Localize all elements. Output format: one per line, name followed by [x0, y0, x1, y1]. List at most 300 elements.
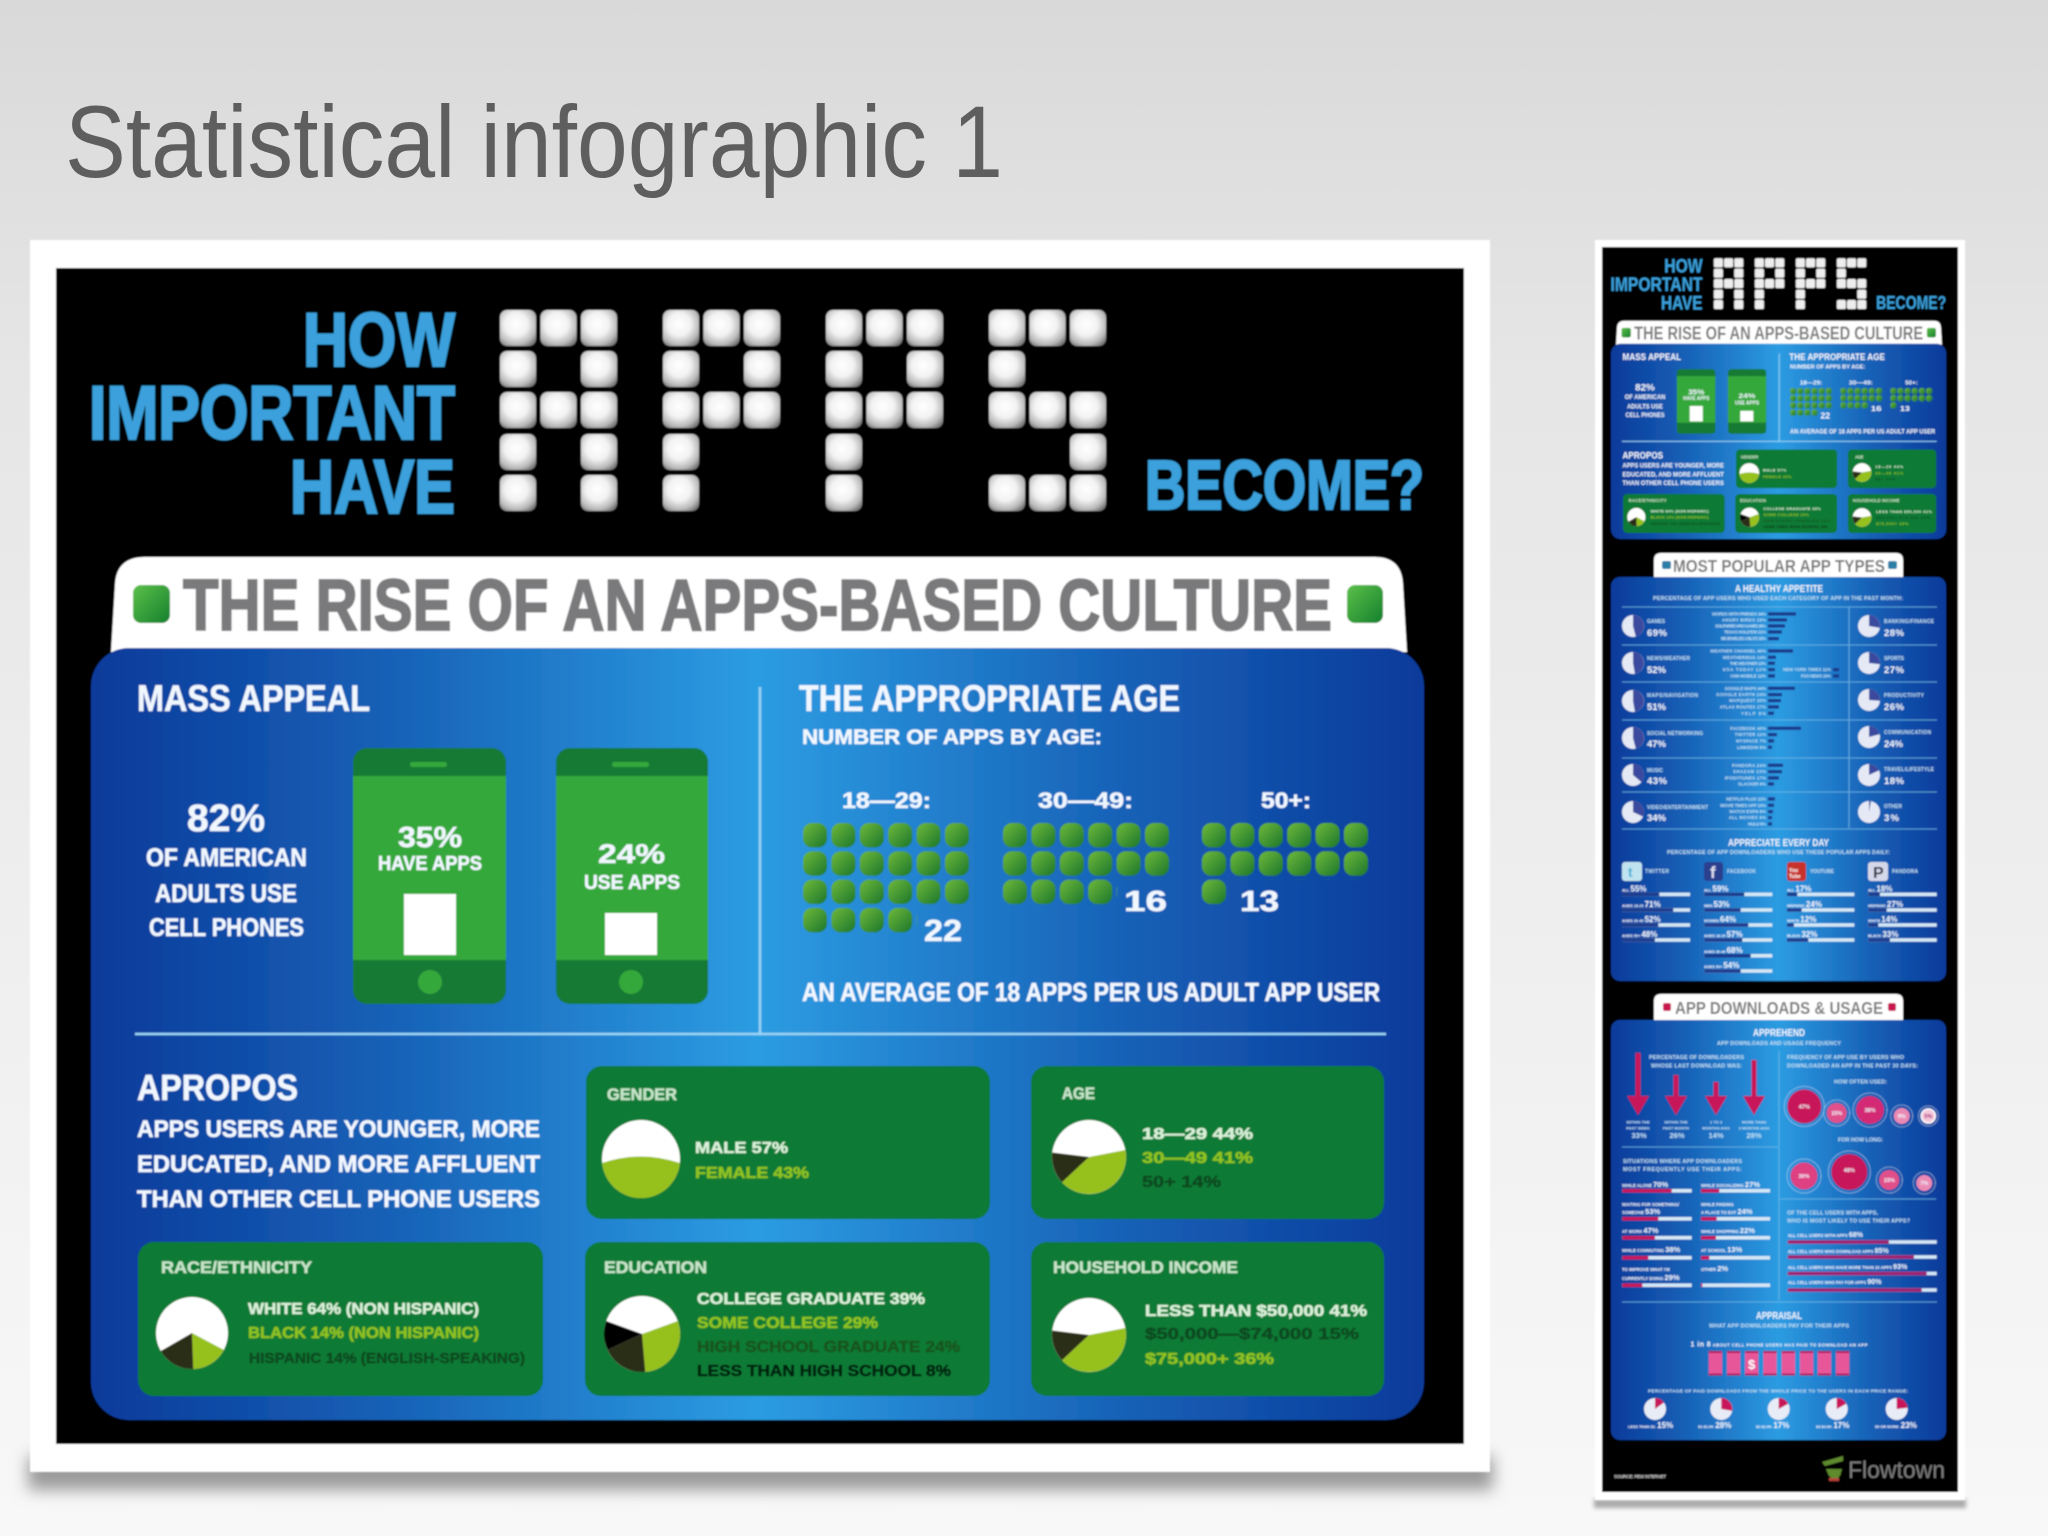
situations labels: AT SCHOOL 13%: [1701, 1245, 1742, 1254]
popular apps labels: TEXAS HOLD'EM 21%: [1724, 630, 1766, 634]
likely users labels: ALL CELL USERS WHO HAVE MORE THAN 10 APPS 93%: [1788, 1264, 1908, 1271]
ribbon: most popular app types: MOST POPULAR APP TYPES: [1673, 556, 1885, 576]
card: household income: [1031, 1242, 1384, 1396]
icon: phone 35% have apps: HAVE APPS: [378, 853, 482, 875]
heading: a healthy appetite: PERCENTAGE OF APP USERS WHO USED EACH CATEGORY OF APP IN THE PAST MONTH:: [1653, 596, 1903, 602]
popular apps labels: YELP 8%: [1741, 711, 1766, 716]
chart: how often used bubbles: 15%: [1831, 1111, 1842, 1117]
popular apps labels: ANGRY BIRDS 29%: [1722, 618, 1766, 622]
thumbnail panel 1 content: MASS APPEAL: [1623, 352, 1681, 362]
daily use value labels: ALL 55%: [1622, 884, 1646, 894]
thumbnail panel 1 content: RACE/ETHNICITY: [1629, 498, 1667, 503]
social app names: YOUTUBE: [1810, 869, 1835, 875]
left category labels: SOCIAL NETWORKING: [1647, 731, 1703, 737]
headline: become: BECOME?: [1145, 446, 1424, 524]
arrow labels: 33%: [1631, 1131, 1647, 1140]
thumbnail panel 1 content: BLACK 14% (NON HISPANIC): [1650, 515, 1709, 520]
thumbnail panel 1 content: LESS THAN $50,000 41%: [1876, 509, 1932, 514]
daily use value labels: AGES 30-49 52%: [1622, 915, 1661, 924]
left category labels: 47%: [1647, 739, 1667, 750]
card: education: COLLEGE GRADUATE 39%: [697, 1291, 925, 1308]
left category labels: VIDEO/ENTERTAINMENT: [1647, 805, 1708, 811]
popular apps labels: ATLAS ROUTES 17%: [1720, 704, 1766, 710]
popular apps labels: ALL MOVIES 6%: [1729, 815, 1766, 820]
price range labels: LESS THAN $1: 15%: [1628, 1421, 1673, 1430]
block: mass appeal: MASS APPEAL: [137, 678, 370, 719]
heading: apprehend: [1649, 1028, 1841, 1070]
chart: daily use bar tracks: [1622, 893, 1937, 973]
price range labels: $1-$1.99: 28%: [1698, 1421, 1731, 1430]
icons: social apps: [1622, 862, 1888, 882]
daily use value labels: AGES 50+ 54%: [1704, 961, 1739, 970]
thumbnail panel 1 content: ADULTS USE: [1627, 403, 1663, 410]
card: race/ethnicity: BLACK 14% (NON HISPANIC): [248, 1325, 479, 1342]
chart: popular apps bars: [1768, 612, 1839, 826]
thumbnail panel 1 content: $75,000+ 36%: [1876, 521, 1909, 526]
icon: phone 24% use apps: [556, 748, 708, 1004]
right category labels: 26%: [1884, 702, 1905, 713]
icons: 1 in 8 phones: $: [1748, 1357, 1756, 1372]
left category labels: 34%: [1647, 813, 1667, 824]
card: age: 30—49 41%: [1142, 1150, 1253, 1167]
thumbnail panel 1 content: 18—29:: [1800, 380, 1822, 387]
arrow labels: PAST WEEK: [1626, 1126, 1650, 1130]
right category labels: BANKING/FINANCE: [1884, 619, 1935, 625]
likely users labels: ALL CELL USERS WITH APPS 68%: [1788, 1232, 1864, 1239]
heading: apprehend: PERCENTAGE OF DOWNLOADERS: [1649, 1055, 1744, 1061]
thumbnail headline: BECOME?: [1876, 293, 1946, 313]
right category labels: OTHER: [1884, 804, 1902, 810]
chart: how often used bubbles: 47%: [1799, 1104, 1810, 1110]
slide title: Statistical infographic 1: [65, 85, 1003, 199]
daily use value labels: WHITE 12%: [1787, 915, 1816, 924]
popular apps labels: SHAZAM 23%: [1733, 769, 1766, 774]
headline: how important have: HAVE: [290, 445, 455, 530]
chart: right category pies: [1858, 615, 1880, 823]
block: mass appeal: CELL PHONES: [149, 914, 304, 942]
thumbnail panel 1 content: HAVE APPS: [1683, 396, 1710, 402]
thumbnail frame shadow: [1594, 1499, 1966, 1508]
daily use value labels: WOMEN 64%: [1704, 915, 1736, 924]
thumbnail white frame: [1595, 240, 1965, 1500]
price range labels: [1628, 1421, 1917, 1430]
popular apps labels: WEATHERBUG 14%: [1723, 655, 1766, 660]
caption: paid downloads: PERCENTAGE OF PAID DOWNLOADS FROM THE WHOLE PRICE TO THE USERS IN EACH PRICE RANGE:: [1648, 1388, 1908, 1394]
icons: social apps: You: [1789, 868, 1798, 874]
logo: Flowtown: Flowtown: [1848, 1457, 1945, 1484]
social app names: TWITTER: [1645, 869, 1669, 875]
card: gender: MALE 57%: [695, 1140, 788, 1157]
card: age: 18—29 44%: [1142, 1126, 1253, 1143]
popular apps labels: THE WEATHER 13%: [1730, 661, 1766, 666]
heading: appraisal: [1690, 1311, 1868, 1348]
block: the appropriate age: [799, 678, 1380, 1007]
chart: for how long bubbles: 15%: [1884, 1178, 1895, 1184]
daily use value labels: HISPANIC 24%: [1787, 900, 1822, 909]
left category labels: 52%: [1647, 665, 1667, 676]
arrow labels: MORE THAN: [1742, 1120, 1766, 1124]
card: education: LESS THAN HIGH SCHOOL 8%: [697, 1363, 951, 1380]
block: apropos text: THAN OTHER CELL PHONE USERS: [137, 1186, 540, 1213]
main frame shadow: [28, 1456, 1493, 1490]
block: the appropriate age: 18—29:: [842, 788, 931, 813]
right category labels: 28%: [1884, 628, 1905, 639]
situations labels: WHILE FINDING: [1701, 1202, 1734, 1207]
thumbnail panel 1 content: SOME COLLEGE 29%: [1763, 512, 1809, 517]
blue panel 2: [1611, 577, 1946, 981]
card: household income: LESS THAN $50,000 41%: [1145, 1303, 1367, 1320]
thumbnail panel 1 content: GENDER: [1741, 454, 1758, 459]
heading: frequency of app use: [1787, 1055, 1918, 1144]
card: age: AGE: [1062, 1084, 1095, 1103]
situations labels: OTHER 2%: [1701, 1264, 1728, 1273]
chart: how often used bubbles: 5%: [1924, 1114, 1932, 1120]
popular apps labels: LINKEDIN 5%: [1737, 745, 1766, 750]
chart: daily use bar fills: [1622, 893, 1890, 973]
popular apps labels: NETFLIX PLUS 12%: [1726, 796, 1766, 802]
headline: how important have: [89, 298, 455, 530]
situations labels: [1622, 1180, 1760, 1282]
social app names: PANDORA: [1892, 869, 1918, 875]
thumbnail panel 1 content: AN AVERAGE OF 18 APPS PER US ADULT APP USER: [1790, 428, 1935, 435]
thumbnail section 2: most popular app types: [1611, 553, 1946, 981]
thumbnail panel 1 content: 50+ 14%: [1875, 476, 1896, 481]
daily use value labels: ALL 17%: [1787, 884, 1811, 894]
chart: for how long bubbles: 48%: [1844, 1168, 1855, 1174]
card: age: 50+ 14%: [1142, 1174, 1221, 1191]
daily use value labels: HISPANIC 27%: [1868, 900, 1903, 909]
situations labels: WHILE COMMUTING 38%: [1622, 1245, 1681, 1254]
icons: social apps: Tube: [1789, 874, 1801, 880]
situations labels: A PLACE TO EAT 24%: [1701, 1207, 1753, 1216]
block: the appropriate age: AN AVERAGE OF 18 APPS PER US ADULT APP USER: [802, 977, 1380, 1007]
heading: frequency of app use: HOW OFTEN USED:: [1834, 1080, 1887, 1086]
heading: a healthy appetite: [1653, 584, 1903, 602]
thumbnail headline: IMPORTANT: [1610, 275, 1703, 296]
thumbnail panel 1 content: EDUCATED, AND MORE AFFLUENT: [1623, 472, 1724, 478]
thumbnail panel 1 content: 50+:: [1905, 380, 1918, 387]
likely users labels: ALL CELL USERS WHO DOWNLOAD APPS 85%: [1788, 1248, 1889, 1255]
chart: apps by age pictograms: [803, 823, 1372, 935]
block: the appropriate age: 30—49:: [1038, 788, 1133, 813]
heading: situations: MOST FREQUENTLY USE THEIR APPS:: [1623, 1167, 1742, 1173]
thumbnail panel 1 content: 13: [1900, 404, 1910, 413]
thumbnail panel 1 content: WHITE 64% (NON HISPANIC): [1650, 509, 1709, 514]
block: the appropriate age: THE APPROPRIATE AGE: [799, 678, 1180, 719]
left category labels: GAMES: [1647, 619, 1666, 625]
block: the appropriate age: 13: [1240, 886, 1279, 918]
panel: enlarged infographic excerpt: [30, 240, 1490, 1472]
daily use value labels: [1622, 884, 1903, 970]
social app names: FACEBOOK: [1727, 869, 1756, 875]
thumbnail section 1: rise of apps culture: [1610, 256, 1946, 539]
headline: how important have: HOW: [303, 298, 455, 383]
left category labels: 51%: [1647, 702, 1667, 713]
block: mass appeal: ADULTS USE: [155, 880, 297, 908]
popular apps labels: USA TODAY 12%: [1723, 667, 1766, 672]
thumbnail panel 1 content: USE APPS: [1735, 401, 1760, 407]
thumbnail panel 1 content: COLLEGE GRADUATE 39%: [1763, 506, 1821, 511]
situations labels: WAITING FOR SOMETHING/: [1622, 1202, 1680, 1207]
likely users labels: ALL CELL USERS WHO PAY FOR APPS 90%: [1788, 1279, 1882, 1286]
heading: apprehend: WHOSE LAST DOWNLOAD WAS:: [1651, 1064, 1742, 1070]
thumbnail blue panel 1: [1611, 344, 1946, 539]
thumbnail headline: [1610, 256, 1946, 315]
headline: APPS pixel letters: [500, 310, 1106, 511]
blue panel 3: [1611, 1020, 1946, 1440]
chart: for how long bubbles: 30%: [1798, 1174, 1810, 1180]
popular apps labels: SOLITAIRE/CARD GAMES 26%: [1715, 624, 1766, 628]
popular apps labels: HULU 6%: [1748, 822, 1766, 826]
card: education: EDUCATION: [604, 1258, 707, 1277]
chart: situations bar fills: [1622, 1189, 1719, 1287]
thumbnail panel 1 content: 18—29 44%: [1875, 464, 1904, 469]
heading: situations: SITUATIONS WHERE APP DOWNLOADERS: [1623, 1159, 1742, 1165]
panel: blue content area: [91, 648, 1424, 1420]
thumbnail panel 1 content: 30—49:: [1849, 380, 1873, 387]
daily use value labels: MEN 53%: [1704, 900, 1730, 909]
card: education: HIGH SCHOOL GRADUATE 24%: [697, 1339, 960, 1356]
heading: appraisal: APPRAISAL: [1756, 1311, 1802, 1322]
icons: 1 in 8 phones: [1709, 1351, 1849, 1376]
popular apps labels: GOOGLE EARTH 24%: [1716, 692, 1766, 697]
source note: SOURCE: PEW INTERNET: [1614, 1474, 1666, 1479]
popular apps labels: PANDORA 24%: [1732, 763, 1766, 768]
thumbnail panel 1 content: THE APPROPRIATE AGE: [1789, 352, 1885, 362]
arrow labels: [1626, 1120, 1769, 1140]
panel: full infographic thumbnail: [1595, 240, 1965, 1500]
situations labels: TO IMPROVE WHAT I'M: [1622, 1267, 1670, 1272]
arrow labels: 26%: [1669, 1131, 1685, 1140]
heading: appreciate every day: PERCENTAGE OF APP DOWNLOADERS WHO USE THESE POPULAR APPS DAILY:: [1667, 850, 1890, 856]
heading: appraisal: 1 in 8 ABOUT CELL PHONE USERS HAS PAID TO DOWNLOAD AN APP: [1690, 1342, 1868, 1348]
headline: how important have: IMPORTANT: [89, 371, 455, 456]
popular apps labels: MAPQUEST 20%: [1729, 698, 1766, 703]
icon: phone 24% use apps: 24%: [598, 839, 665, 869]
block: mass appeal: 82%: [187, 798, 265, 840]
arrow labels: WITHIN THE: [1664, 1120, 1688, 1124]
thumbnail panel 1 content: 35%: [1688, 387, 1705, 396]
heading: appraisal: WHAT APP DOWNLOADERS PAY FOR THEIR APPS: [1709, 1324, 1849, 1330]
thumbnail panel 1 content: AGE: [1855, 454, 1864, 459]
thumbnail panel 1 content: CELL PHONES: [1626, 412, 1665, 419]
heading: frequency of app use: DOWNLOADED AN APP IN THE PAST 30 DAYS:: [1787, 1064, 1918, 1070]
card: age: [1031, 1066, 1384, 1219]
thumbnail panel 1 content: $50,000—$74,000 15%: [1876, 515, 1930, 520]
popular apps labels: FOX NEWS 10%: [1801, 674, 1831, 678]
thumbnail panel 1 content: [1622, 352, 1937, 533]
situations labels: WHILE SOCIALIZING 27%: [1701, 1180, 1760, 1189]
black background: [56, 268, 1464, 1444]
card: gender: FEMALE 43%: [695, 1165, 809, 1182]
heading: appreciate every day: [1667, 838, 1890, 856]
icon: phone 24% use apps: USE APPS: [584, 872, 680, 894]
card: gender: GENDER: [607, 1085, 677, 1104]
card: race/ethnicity: WHITE 64% (NON HISPANIC): [248, 1301, 479, 1318]
daily use value labels: AGES 18-29 57%: [1704, 930, 1743, 939]
popular apps labels: NEW YORK TIMES 11%: [1783, 667, 1831, 672]
ribbon: app downloads and usage: APP DOWNLOADS & USAGE: [1675, 998, 1883, 1018]
thumbnail APPS pixel letters: [1714, 258, 1866, 309]
popular apps labels: SLACKER 9%: [1738, 782, 1766, 786]
thumbnail panel 1 content: 30—49 41%: [1875, 470, 1904, 475]
thumbnail panel 1 content: APPS USERS ARE YOUNGER, MORE: [1623, 463, 1724, 469]
heading: appreciate every day: APPRECIATE EVERY DAY: [1728, 838, 1829, 849]
right category labels: TRAVEL/LIFESTYLE: [1884, 767, 1935, 773]
card: household income: $50,000—$74,000 15%: [1145, 1326, 1359, 1343]
price range labels: $2-$2.99: 17%: [1756, 1421, 1789, 1430]
thumbnail panel 1 content: THAN OTHER CELL PHONE USERS: [1623, 481, 1724, 487]
daily use value labels: ALL 18%: [1868, 884, 1892, 894]
social app names: [1645, 869, 1918, 875]
chart: for how long bubbles: [1787, 1151, 1935, 1194]
icons: social apps: t: [1628, 864, 1633, 880]
icons: social apps: P: [1873, 865, 1884, 882]
situations labels: AT WORK 47%: [1622, 1226, 1659, 1235]
left category labels: NEWS/WEATHER: [1647, 656, 1690, 662]
popular apps labels: WEATHER CHANNEL 46%: [1710, 648, 1766, 654]
thumbnail panel 1 content: HISPANIC 14% (ENGLISH-SPEAKING): [1651, 522, 1721, 526]
right category labels: 18%: [1884, 776, 1905, 787]
block: the appropriate age: 22: [924, 913, 962, 948]
left category labels: [1647, 619, 1708, 824]
chart: for how long bubbles: 7%: [1920, 1181, 1928, 1187]
thumbnail panel 1 content: APROPOS: [1623, 450, 1663, 460]
heading: a healthy appetite: A HEALTHY APPETITE: [1735, 584, 1823, 595]
section ribbon: the rise of an apps-based culture: THE RISE OF AN APPS-BASED CULTURE: [183, 566, 1332, 646]
right category labels: 3%: [1884, 813, 1900, 824]
daily use value labels: AGES 30-49 68%: [1704, 946, 1743, 955]
thumbnail ribbon: THE RISE OF AN APPS-BASED CULTURE: [1634, 323, 1923, 344]
card: race/ethnicity: RACE/ETHNICITY: [161, 1258, 313, 1277]
situations labels: SOMEONE 53%: [1622, 1207, 1661, 1216]
daily use value labels: ALL 59%: [1704, 884, 1728, 894]
popular apps labels: WORDS WITH FRIENDS 34%: [1712, 612, 1766, 616]
thumbnail panel 1 content: 22: [1820, 411, 1831, 420]
thumbnail headline: HAVE: [1661, 294, 1703, 315]
heading: of the cell users: OF THE CELL USERS WITH APPS,: [1787, 1210, 1878, 1216]
left category labels: MAPS/NAVIGATION: [1647, 693, 1698, 699]
daily use value labels: AGES 18-29 71%: [1622, 900, 1661, 909]
price range labels: $3-$4.99: 17%: [1816, 1421, 1849, 1430]
heading: situations: [1623, 1159, 1742, 1173]
chart grid lines: [1622, 607, 1937, 829]
right category labels: 24%: [1884, 739, 1904, 750]
popular apps labels: [1710, 612, 1831, 826]
thumbnail black background: [1602, 247, 1958, 1492]
card: household income: $75,000+ 36%: [1145, 1351, 1274, 1368]
arrow labels: 3 MONTHS AGO: [1739, 1126, 1769, 1130]
thumbnail panel 1 content: HIGH SCHOOL GRADUATE 24%: [1763, 518, 1830, 523]
price range labels: $5 OR MORE: 23%: [1875, 1421, 1917, 1430]
left category labels: 69%: [1647, 628, 1668, 639]
card: gender: [586, 1066, 990, 1219]
card: race/ethnicity: [138, 1242, 543, 1396]
chart: how often used bubbles: 38%: [1864, 1108, 1876, 1114]
arrow labels: MONTHS AGO: [1702, 1126, 1730, 1130]
arrow labels: PAST MONTH: [1663, 1126, 1689, 1130]
daily use value labels: WHITE 14%: [1868, 915, 1897, 924]
thumbnail panel 1 content: OF AMERICAN: [1625, 394, 1666, 401]
card: education: [585, 1242, 990, 1396]
popular apps labels: TWITTER 11%: [1735, 732, 1766, 737]
left category labels: MUSIC: [1647, 768, 1663, 774]
block: apropos text: APROPOS: [137, 1067, 298, 1108]
icon: phone 35% have apps: 35%: [398, 822, 462, 854]
popular apps labels: MOVIE TIMES APP 10%: [1720, 803, 1766, 808]
heading: frequency of app use: FREQUENCY OF APP USE BY USERS WHO: [1787, 1055, 1905, 1061]
thumbnail panel 1 content: MALE 57%: [1763, 468, 1787, 473]
thumbnail panel 1 content: 16: [1871, 404, 1882, 413]
thumbnail headline: HOW: [1664, 256, 1703, 277]
card: household income: HOUSEHOLD INCOME: [1053, 1258, 1238, 1277]
block: the appropriate age: 50+:: [1261, 788, 1311, 813]
heading: of the cell users: WHO IS MOST LIKELY TO USE THEIR APPS?: [1787, 1218, 1911, 1224]
block: mass appeal: [137, 678, 370, 942]
thumbnail section 3: app downloads and usage: [1611, 994, 1946, 1484]
heading: of the cell users: [1787, 1210, 1911, 1224]
left category labels: 43%: [1647, 776, 1668, 787]
icons: social apps: f: [1710, 863, 1716, 882]
arrow labels: 28%: [1746, 1131, 1762, 1140]
popular apps labels: BEJEWELED 2 BLITZ 15%: [1721, 636, 1766, 641]
right category labels: SPORTS: [1884, 656, 1905, 662]
ribbon: app downloads and usage: [1654, 994, 1903, 1021]
heading: apprehend: APPREHEND: [1753, 1028, 1805, 1039]
right category labels: PRODUCTIVITY: [1884, 693, 1925, 699]
popular apps labels: MYSPACE 7%: [1736, 738, 1766, 744]
heading: frequency of app use: FOR HOW LONG:: [1838, 1138, 1883, 1144]
situations labels: WHILE SHOPPING 22%: [1701, 1226, 1755, 1235]
dividers: [135, 687, 1386, 1035]
daily use value labels: AGES 50+ 48%: [1622, 930, 1657, 939]
block: apropos text: EDUCATED, AND MORE AFFLUENT: [137, 1151, 540, 1178]
thumbnail panel 1 content: 24%: [1738, 393, 1755, 400]
situations labels: WHILE ALONE 70%: [1622, 1180, 1668, 1189]
section dividers: [1622, 1051, 1937, 1302]
arrow labels: WITHIN THE: [1626, 1120, 1650, 1124]
situations labels: CURRENTLY DOING 29%: [1622, 1273, 1680, 1282]
popular apps labels: FACEBOOK 40%: [1730, 726, 1766, 731]
block: apropos text: APPS USERS ARE YOUNGER, MORE: [137, 1116, 540, 1143]
chart: situations bar tracks: [1622, 1189, 1770, 1287]
thumbnail panel 1 content: NUMBER OF APPS BY AGE:: [1790, 364, 1865, 370]
block: mass appeal: OF AMERICAN: [146, 844, 307, 872]
icon: phone 35% have apps: [353, 748, 506, 1004]
thumbnail panel 1 content: 82%: [1635, 382, 1655, 393]
block: apropos text: [137, 1067, 540, 1213]
block: the appropriate age: 16: [1124, 886, 1167, 918]
card: education: SOME COLLEGE 29%: [697, 1315, 878, 1332]
likely users labels: [1788, 1232, 1908, 1286]
right category labels: COMMUNICATION: [1884, 730, 1931, 736]
right category labels: 27%: [1884, 665, 1905, 676]
chart: how often used bubbles: [1784, 1086, 1938, 1127]
thumbnail panel 1 content: FEMALE 43%: [1763, 474, 1792, 479]
card: race/ethnicity: HISPANIC 14% (ENGLISH-SPEAKING): [249, 1350, 525, 1367]
chart: price range pies: [1644, 1398, 1908, 1420]
chart: likely users bars: [1788, 1240, 1937, 1292]
popular apps labels: IPOD/ITUNES 17%: [1725, 776, 1766, 780]
chart: left category pies: [1622, 615, 1644, 823]
popular apps labels: WATCH ESPN 8%: [1729, 809, 1766, 814]
thumbnail panel 1 content: LESS THAN HIGH SCHOOL 8%: [1763, 524, 1828, 529]
white frame: [30, 240, 1490, 1472]
right category labels: [1884, 619, 1935, 824]
arrow labels: 1 TO 3: [1710, 1120, 1723, 1124]
popular apps labels: GOOGLE MAPS 44%: [1725, 686, 1766, 691]
heading: apprehend: APP DOWNLOADS AND USAGE FREQUENCY: [1717, 1041, 1841, 1047]
